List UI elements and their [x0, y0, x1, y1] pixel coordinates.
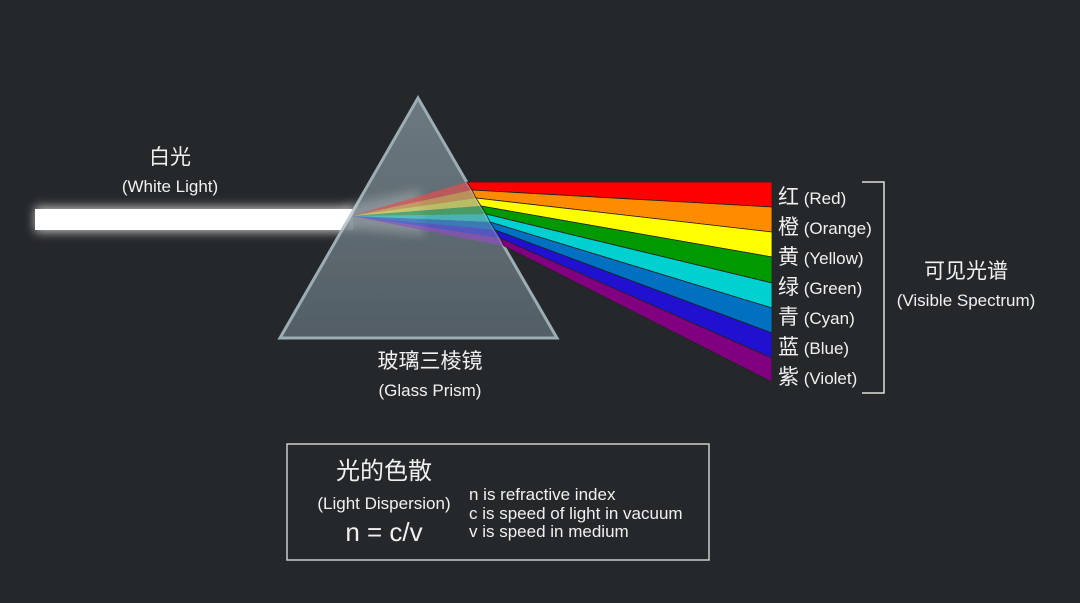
formula explanation: n is refractive index	[469, 485, 615, 504]
label: white light	[122, 146, 218, 196]
formula explanation	[469, 485, 683, 541]
glass prism	[280, 98, 557, 338]
inner dispersion fan	[352, 182, 504, 246]
spectrum labels: 绿 (Green)	[778, 276, 862, 299]
label: glass prism: 玻璃三棱镜	[378, 350, 482, 373]
formula box	[287, 444, 709, 560]
spectrum labels: 红 (Red)	[778, 186, 846, 209]
label: white light: (White Light)	[122, 177, 218, 196]
label: visible spectrum: 可见光谱	[924, 260, 1008, 283]
formula: light dispersion: 光的色散	[336, 458, 432, 485]
formula: light dispersion: n = c/v	[345, 517, 423, 547]
formula explanation: c is speed of light in vacuum	[469, 504, 683, 522]
label: glass prism	[378, 350, 482, 400]
spectrum labels	[778, 186, 872, 389]
label: visible spectrum	[897, 260, 1035, 310]
spectrum labels: 橙 (Orange)	[778, 216, 872, 239]
spectrum labels: 蓝 (Blue)	[778, 336, 849, 359]
label: white light: 白光	[149, 146, 191, 169]
spectrum labels: 黄 (Yellow)	[778, 246, 864, 269]
spectrum bands	[467, 182, 772, 382]
spectrum labels: 青 (Cyan)	[778, 306, 855, 329]
formula: light dispersion: (Light Dispersion)	[317, 494, 451, 513]
label: visible spectrum: (Visible Spectrum)	[897, 291, 1035, 310]
white light beam	[35, 207, 353, 232]
bracket	[862, 182, 884, 393]
formula: light dispersion	[317, 458, 451, 547]
spectrum labels: 紫 (Violet)	[778, 366, 857, 389]
formula explanation: v is speed in medium	[469, 522, 629, 541]
label: glass prism: (Glass Prism)	[379, 381, 481, 400]
